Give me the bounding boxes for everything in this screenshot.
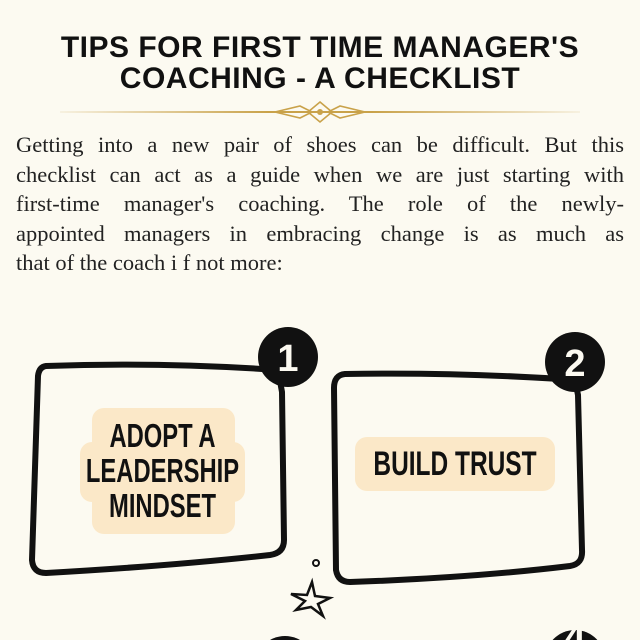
label: build trust: BUILD TRUST bbox=[373, 445, 537, 483]
label: adopt a leadership mindset: MINDSET bbox=[109, 487, 216, 524]
icon: number 2: 2 bbox=[564, 343, 586, 385]
icon: star bbox=[291, 582, 330, 616]
title: COACHING - A CHECKLIST bbox=[120, 62, 520, 95]
icon: number 1: 1 bbox=[277, 338, 299, 380]
intro paragraph: that of the coach i f not more: bbox=[16, 250, 283, 275]
label: adopt a leadership mindset bbox=[80, 408, 245, 534]
divider ornament bbox=[60, 101, 580, 123]
icon: number 3 (partial) bbox=[255, 636, 315, 640]
icon: number 1 bbox=[258, 327, 318, 387]
icon: number 2 bbox=[545, 332, 605, 392]
intro paragraph bbox=[16, 132, 624, 275]
title bbox=[61, 31, 579, 95]
title: TIPS FOR FIRST TIME MANAGER'S bbox=[61, 31, 579, 64]
intro paragraph: Getting into a new pair of shoes can be difficult. But this bbox=[16, 132, 624, 157]
label: adopt a leadership mindset: LEADERSHIP bbox=[86, 452, 239, 489]
panel: step 2 box bbox=[334, 374, 582, 582]
intro paragraph: first-time manager's coaching. The role of the newly- bbox=[16, 191, 624, 216]
icon: number 4 (partial) bbox=[545, 617, 605, 640]
icon: small circle bbox=[313, 560, 319, 566]
label: build trust bbox=[355, 437, 555, 491]
intro paragraph: appointed managers in embracing change is as much as bbox=[16, 220, 624, 246]
intro paragraph: checklist can act as a guide when we are just starting with bbox=[16, 162, 624, 186]
label: adopt a leadership mindset: ADOPT A bbox=[109, 417, 216, 454]
panel: step boxes bbox=[29, 327, 605, 640]
